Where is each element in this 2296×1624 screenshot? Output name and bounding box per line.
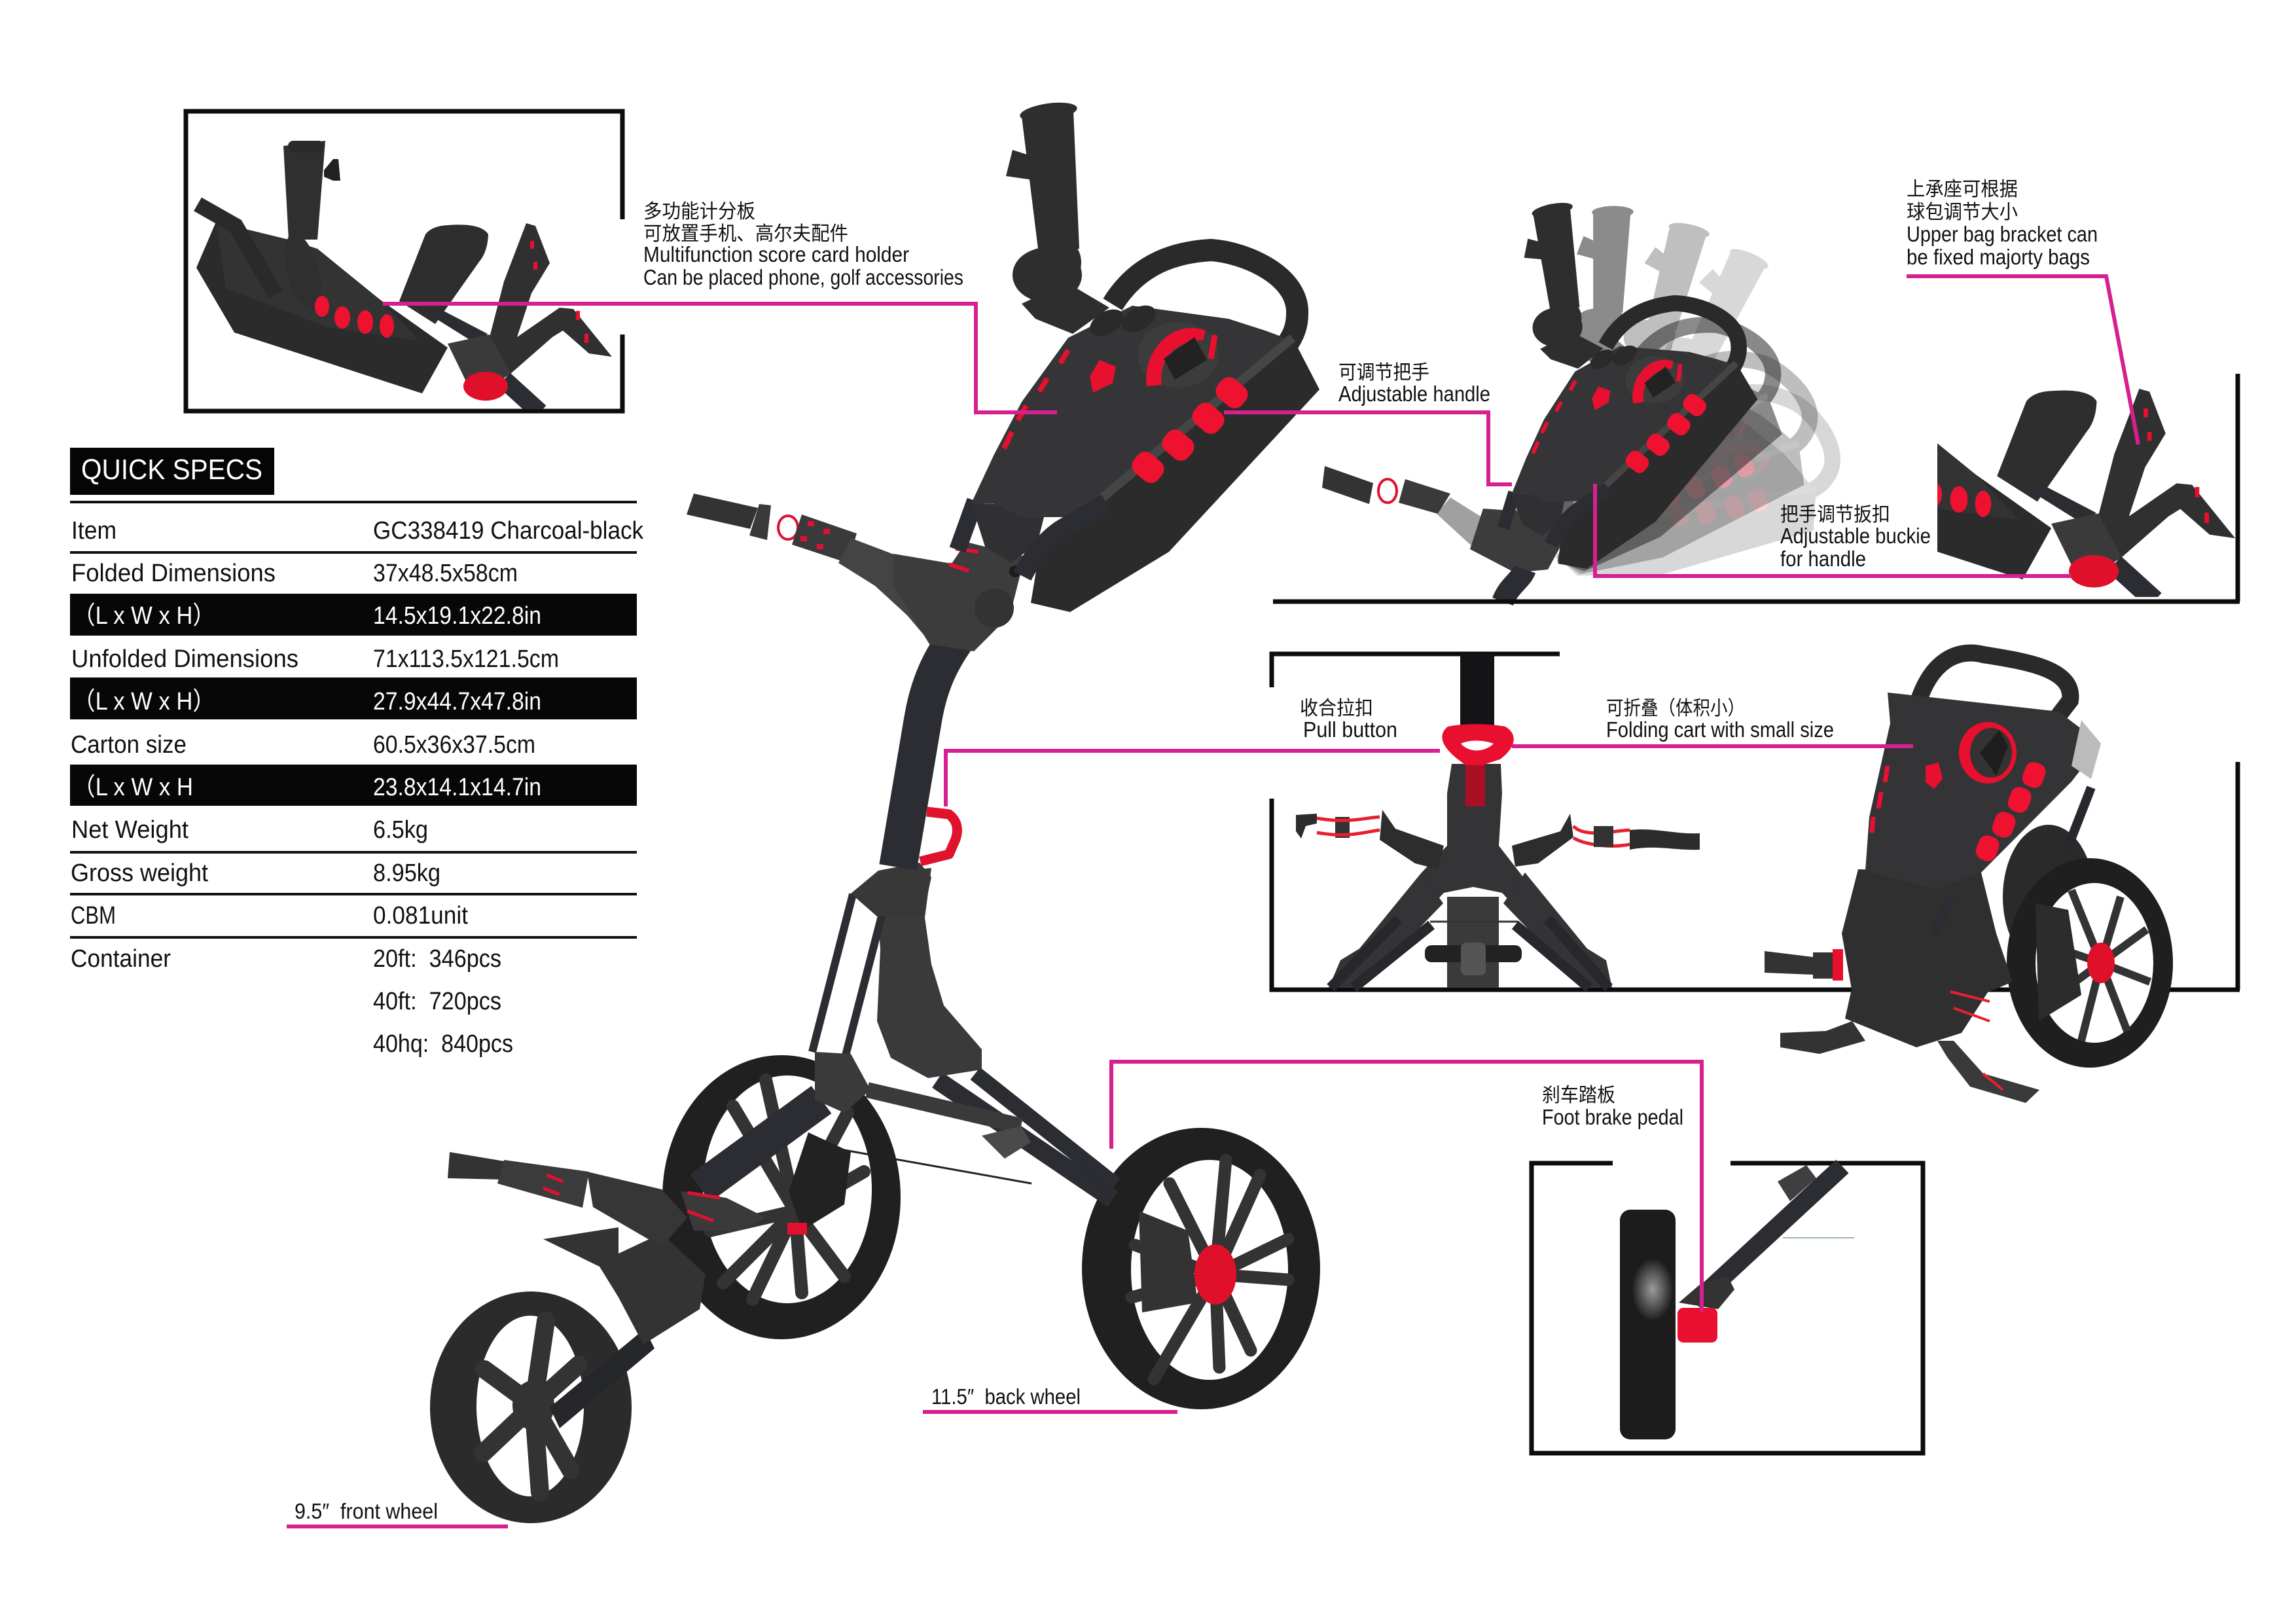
arrow: bag bracket leader (1907, 276, 2138, 444)
spec rows text: 0.081unit (373, 902, 468, 929)
callout text: adjustable buckle: 把手调节扳扣 (1780, 504, 1890, 526)
callout text: score card holder (643, 201, 963, 289)
spec rows text: Net Weight (71, 816, 188, 844)
panel frame (1532, 1163, 1923, 1453)
left strap (1296, 814, 1380, 839)
small cart strap and arm (1322, 466, 1567, 602)
label: front wheel size: 9.5″ front wheel (295, 1499, 438, 1523)
callout text: foot brake pedal: 刹车踏板 (1542, 1085, 1615, 1106)
rear frame struts (837, 1074, 1115, 1199)
arrow: buckle leader (1595, 484, 2072, 576)
callout text: score card holder: 多功能计分板 (643, 201, 755, 223)
spec rows text: （L x W x H） (73, 688, 215, 715)
spec rows text: 20ft: 346pcs (373, 945, 501, 973)
callout text: adjustable handle (1338, 362, 1490, 406)
chassis struts (812, 894, 885, 1060)
arrow: folding cart leader (1512, 744, 1913, 748)
lower chassis joint (815, 1052, 870, 1113)
spec rows text: 40ft: 720pcs (373, 988, 501, 1015)
spec rows text: 14.5x19.1x22.8in (373, 602, 541, 630)
callout text: upper bag bracket: Upper bag bracket can (1907, 222, 2098, 246)
callout text: foot brake pedal (1542, 1085, 1683, 1129)
red pull handle front view (1442, 724, 1514, 765)
red edge ticks (1004, 350, 1068, 448)
spec rows text: Folded Dimensions (71, 560, 276, 587)
brake inset tyre (1620, 1210, 1676, 1439)
spec rows text: 40hq: 840pcs (373, 1030, 513, 1058)
spec rows text (71, 517, 644, 1058)
spec rows text: Gross weight (71, 859, 208, 887)
console lower shell (1031, 338, 1319, 612)
callout text: pull button (1300, 698, 1397, 742)
red grip tabs (1128, 373, 1252, 487)
callout text: upper bag bracket: be fixed majorty bags (1907, 245, 2090, 269)
arrow: adjustable handle leader (1224, 412, 1512, 484)
spec rows text: 60.5x36x37.5cm (373, 731, 535, 759)
icon: red brake pedal (1677, 1308, 1717, 1343)
panel frame: handle and bracket (1273, 374, 2240, 602)
callout text: upper bag bracket: 球包调节大小 (1907, 202, 2018, 223)
panel frame (1272, 654, 2240, 990)
side rail (1096, 338, 1293, 503)
central thick tube (700, 1100, 821, 1188)
handle arch (1113, 250, 1297, 346)
spec rows text: 6.5kg (373, 816, 428, 844)
red cup ring (1138, 322, 1219, 388)
red clip (1090, 360, 1116, 393)
folded cart illustration (1765, 653, 2173, 1103)
hinge assembly (893, 542, 1025, 651)
cup holes (1085, 300, 1160, 342)
folded red tabs (1973, 760, 2048, 863)
callout text: adjustable handle: Adjustable handle (1338, 382, 1490, 406)
spec rows text: （L x W x H） (73, 602, 215, 630)
red pull handle (920, 812, 957, 861)
folded handle (1918, 653, 2070, 720)
back-right wheel (1082, 1128, 1320, 1409)
brake inset frame tube (1679, 1165, 1854, 1309)
callout text: folding cart: 可折叠（体积小） (1606, 698, 1745, 719)
upper arm with strap (687, 494, 942, 641)
panel: quick specs table (70, 448, 644, 1058)
callout text: adjustable buckle: for handle (1780, 547, 1866, 571)
connector tube to frame (958, 501, 975, 550)
folded console face (1865, 693, 2101, 890)
lower handle tube (1022, 503, 1106, 576)
folded back wheel (2003, 787, 2173, 1068)
front fork (550, 1329, 655, 1428)
inset cart rear view (196, 141, 612, 412)
current handle position (1486, 191, 1766, 573)
panel: pull button (946, 654, 2240, 990)
callout text: upper bag bracket (1907, 179, 2098, 269)
callout text: adjustable handle: 可调节把手 (1338, 362, 1429, 384)
folded red ring (1959, 722, 2017, 784)
main curved frame tube (898, 622, 969, 867)
hinge block at front (681, 1191, 766, 1231)
callout text: score card holder: Can be placed phone, golf accessories (643, 265, 963, 289)
arrow: score card leader (383, 304, 1057, 412)
callout text: upper bag bracket: 上承座可根据 (1907, 179, 2018, 200)
console group: handle, umbrella holder, scorecard (958, 99, 1319, 612)
spec rows text: 8.95kg (373, 859, 440, 887)
spec rows text: GC338419 Charcoal-black (373, 517, 644, 545)
panel: adjustable handle (1224, 179, 2240, 668)
callout text: foot brake pedal: Foot brake pedal (1542, 1105, 1683, 1129)
callout text: folding cart: Folding cart with small size (1606, 717, 1834, 742)
spec rows text: 37x48.5x58cm (373, 560, 518, 587)
main golf cart illustration (430, 99, 1320, 1523)
spec rows text: （L x W x H (73, 774, 193, 801)
icon: umbrella holder tube (1006, 99, 1109, 334)
spec rows text: Item (71, 517, 117, 545)
heading: quick specs: QUICK SPECS (81, 454, 262, 486)
upper bag bracket inset view (1937, 389, 2236, 597)
right strap (1573, 826, 1700, 850)
red cable loops near front hinge (687, 1193, 720, 1221)
spec rows text: Unfolded Dimensions (71, 645, 298, 673)
callout text: score card holder: 可放置手机、高尔夫配件 (643, 223, 848, 245)
panel: folding cart (1512, 653, 2173, 1103)
front wheel (430, 1291, 632, 1523)
callout text: pull button: 收合拉扣 (1300, 698, 1373, 719)
folded red clip (1926, 763, 1943, 789)
spec rows text: 71x113.5x121.5cm (373, 645, 559, 673)
callout text: score card holder: Multifunction score card holder (643, 242, 909, 266)
arrow: brake pedal leader (1111, 1062, 1702, 1312)
console face (971, 306, 1295, 517)
chassis plate (875, 868, 982, 1078)
folded strap (1765, 897, 2039, 1103)
inset frame (186, 111, 622, 411)
back-left wheel (662, 1055, 901, 1339)
x-shaped chassis front view (1329, 654, 1612, 988)
red stem (1465, 764, 1485, 806)
faded handle positions (1504, 195, 1921, 668)
panel: foot brake pedal (1111, 1062, 1923, 1453)
heading: quick specs (70, 448, 274, 495)
top chassis joint (851, 863, 931, 916)
spec rows text: Container (71, 945, 171, 973)
spec rows text: 23.8x14.1x14.7in (373, 774, 541, 801)
callout text: adjustable buckle (1780, 504, 1931, 571)
spec rows text: Carton size (71, 731, 187, 759)
spec rows text: CBM (71, 902, 116, 929)
callout text: adjustable buckle: Adjustable buckie (1780, 524, 1931, 548)
callout text: folding cart (1606, 698, 1834, 742)
console lower neck fill (971, 503, 1047, 563)
folded lower body (1842, 869, 2013, 1047)
front chassis and foot plate (448, 1152, 706, 1344)
icon: red wheel hub (1194, 1244, 1236, 1305)
arrow: pull button leader (946, 751, 1440, 806)
callout text: pull button: Pull button (1303, 717, 1397, 742)
panel: score card holder inset (186, 111, 1057, 412)
label: back wheel size: 11.5″ back wheel (931, 1384, 1081, 1409)
spec rows text: 27.9x44.7x47.8in (373, 688, 541, 715)
